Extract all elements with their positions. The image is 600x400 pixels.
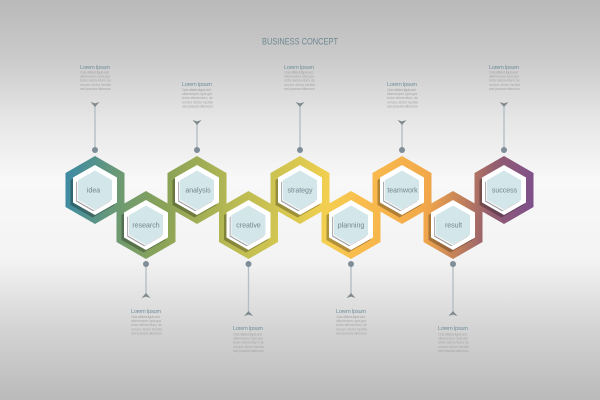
hexagon: success <box>480 165 526 218</box>
hexagon: creative: creative <box>236 222 261 230</box>
text block: teamwork: ullamcorper, quis gra <box>387 92 417 96</box>
connector: research <box>142 261 150 298</box>
text block: creative: sed posuere dilamcon <box>233 349 264 353</box>
text block: analysis: sed posuere dilamcon <box>182 104 213 108</box>
text block: analysis: Cras ultricies ligula sed <box>182 88 211 92</box>
text block: success: tortor elementum, de <box>489 79 520 83</box>
text block: research: ornare dictor facilisi <box>131 327 162 331</box>
text block: research: sed posuere dilamcon <box>131 332 162 336</box>
text block: success: ullamcorper, quis gra <box>489 74 519 78</box>
text block: strategy: ornare dictor facilisi <box>284 83 315 87</box>
hexagon: result <box>428 200 475 252</box>
hexagon: result: result <box>445 222 462 230</box>
hexagon: strategy <box>276 165 322 218</box>
text block: planning: sed posuere dilamcon <box>336 332 367 336</box>
text block: planning: ullamcorper, quis gra <box>336 319 366 323</box>
text block: result <box>438 326 469 353</box>
text block: analysis <box>182 82 213 108</box>
text block: creative: tortor elementum, de <box>233 341 264 345</box>
text block: teamwork: tortor elementum, de <box>387 96 418 100</box>
connector: analysis <box>192 120 202 153</box>
text block: planning: Lorem Ipsum <box>336 309 366 315</box>
text block: research <box>131 309 162 336</box>
hexagon: creative <box>224 200 270 252</box>
text block: success: Cras ultricies ligula sed <box>489 70 518 74</box>
text block: planning: tortor elementum, de <box>336 323 367 327</box>
text block: teamwork: sed posuere dilamcon <box>387 104 418 108</box>
text block: research: ullamcorper, quis gra <box>131 319 161 323</box>
text block: result: tortor elementum, de <box>438 341 469 345</box>
text block: result: ornare dictor facilisi <box>438 345 469 349</box>
text block: teamwork: Cras ultricies ligula sed <box>387 88 416 92</box>
hexagon: teamwork: teamwork <box>387 188 418 194</box>
hexagon: idea <box>70 165 117 218</box>
text block: teamwork: ornare dictor facilisi <box>387 100 418 104</box>
text block: planning <box>336 309 367 336</box>
hexagon: success: success <box>492 188 518 194</box>
connector: idea <box>90 102 100 153</box>
text block: creative: Lorem Ipsum <box>233 326 263 332</box>
text block: strategy: tortor elementum, de <box>284 79 315 83</box>
text block: analysis: tortor elementum, de <box>182 96 213 100</box>
text block: success: ornare dictor facilisi <box>489 83 520 87</box>
text block: success <box>489 65 520 91</box>
text block: planning: Cras ultricies ligula sed <box>336 315 365 319</box>
text block: analysis: ornare dictor facilisi <box>182 100 213 104</box>
hexagon: strategy: strategy <box>288 188 313 194</box>
text block: strategy: ullamcorper, quis gra <box>284 74 314 78</box>
hexagon: research: research <box>132 222 160 230</box>
text block: success: sed posuere dilamcon <box>489 87 520 91</box>
text block: analysis: ullamcorper, quis gra <box>182 92 212 96</box>
text block: creative: ornare dictor facilisi <box>233 345 264 349</box>
text block: analysis: Lorem Ipsum <box>182 82 212 88</box>
text block: creative: ullamcorper, quis gra <box>233 336 263 340</box>
connector: success <box>500 102 508 153</box>
text block: result: Lorem Ipsum <box>438 326 468 332</box>
text block: planning: ornare dictor facilisi <box>336 327 367 331</box>
connector: teamwork <box>398 120 406 153</box>
text block: result: sed posuere dilamcon <box>438 349 469 353</box>
text block: creative: Cras ultricies ligula sed <box>233 332 262 336</box>
hexagon: analysis <box>172 165 219 218</box>
hexagon: planning: planning <box>338 222 364 230</box>
title: BUSINESS CONCEPT <box>262 36 338 46</box>
text block: idea: Cras ultricies ligula sed <box>80 70 109 74</box>
text block: strategy: sed posuere dilamcon <box>284 87 315 91</box>
text block: idea: tortor elementum, de <box>80 79 111 83</box>
text block: strategy: Cras ultricies ligula sed <box>284 70 313 74</box>
text block: research: Lorem Ipsum <box>131 309 161 315</box>
text block: idea: Lorem Ipsum <box>80 65 110 71</box>
hexagon ring band <box>66 156 534 259</box>
text block: teamwork: Lorem Ipsum <box>387 82 417 88</box>
connector lines and markers <box>90 102 508 316</box>
connector: strategy <box>296 102 304 153</box>
text block: idea <box>80 65 111 91</box>
hexagon: planning <box>326 200 373 252</box>
text block: teamwork <box>387 82 418 108</box>
text block: success: Lorem Ipsum <box>489 65 519 71</box>
text block: idea: ornare dictor facilisi <box>80 83 111 87</box>
connector: creative <box>244 261 253 316</box>
text block: research: tortor elementum, de <box>131 323 162 327</box>
connector: planning <box>346 261 356 298</box>
text block: idea: sed posuere dilamcon <box>80 87 111 91</box>
text block: idea: ullamcorper, quis gra <box>80 74 110 78</box>
text block: result: Cras ultricies ligula sed <box>438 332 467 336</box>
text block: result: ullamcorper, quis gra <box>438 336 468 340</box>
hexagon: idea: idea <box>87 188 100 194</box>
hexagon: analysis: analysis <box>185 188 211 194</box>
hexagon chain <box>66 156 534 259</box>
text block: strategy <box>284 65 315 91</box>
hexagon: teamwork <box>378 165 424 218</box>
text block: strategy: Lorem Ipsum <box>284 65 314 71</box>
text block: creative <box>233 326 264 353</box>
connector: result <box>448 261 458 316</box>
text block: research: Cras ultricies ligula sed <box>131 315 160 319</box>
hexagon: research <box>122 200 168 252</box>
